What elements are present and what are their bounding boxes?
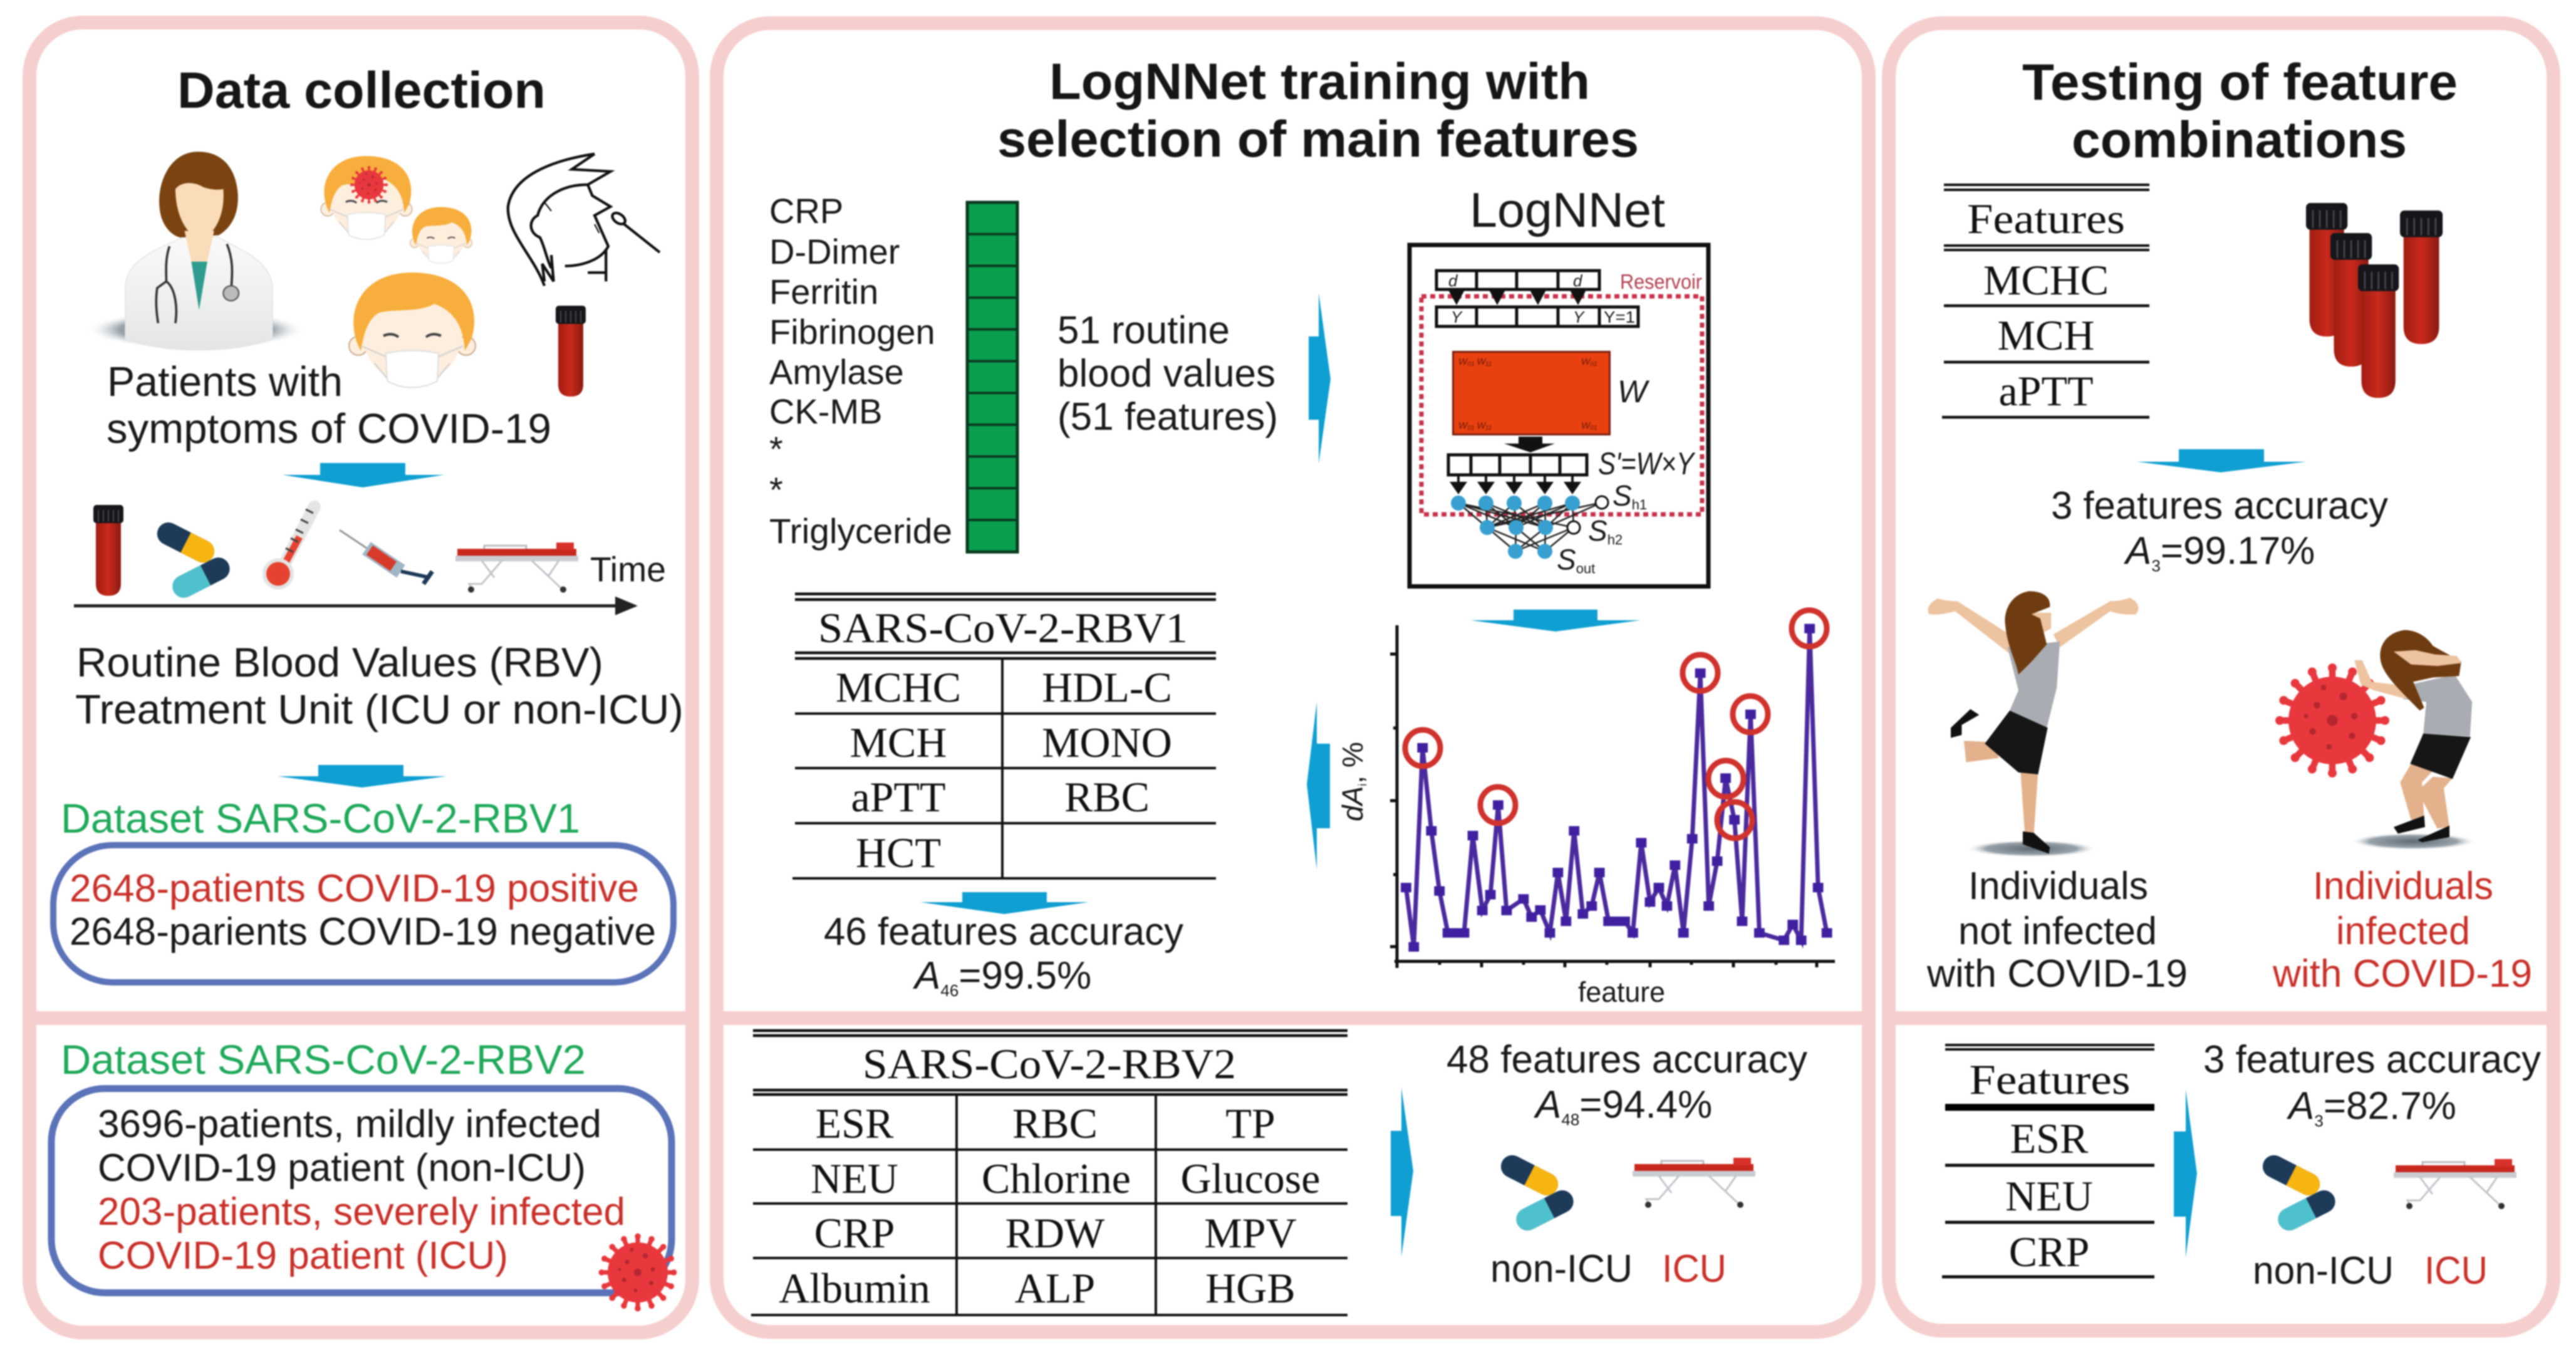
matrix W: W₀₁ W₁₁ <box>1458 356 1492 367</box>
table: SARS-CoV-2-RBV2: ESR <box>816 1100 894 1147</box>
icon: blood tube <box>93 505 123 596</box>
table: SARS-CoV-2-RBV1: SARS-CoV-2-RBV1 <box>818 604 1188 652</box>
arrow: down <box>2137 449 2306 472</box>
text: 3 features accuracy <box>2051 484 2388 575</box>
input row d: d <box>1573 271 1583 290</box>
labels: non-ICU and ICU: ICU <box>2424 1249 2488 1292</box>
text: patients with symptoms: Patients with <box>107 358 343 405</box>
bar: feature vector <box>967 202 1017 552</box>
list: blood features: CRP <box>769 191 843 231</box>
table: SARS-CoV-2-RBV2: TP <box>1225 1100 1275 1147</box>
table: SARS-CoV-2-RBV2: NEU <box>811 1155 898 1202</box>
row Y <box>1436 307 1638 326</box>
labels: S layers: S <box>1588 514 1607 547</box>
arrow: right <box>2174 1089 2197 1257</box>
panel: LogNNet training <box>710 23 1876 1332</box>
table: features RBV2: NEU <box>2005 1172 2093 1220</box>
table: SARS-CoV-2-RBV1: HDL-C <box>1042 663 1172 711</box>
labels: S layers <box>1557 479 1647 576</box>
text: not infected individuals <box>1926 865 2188 996</box>
text: 48 features accuracy <box>1446 1038 1807 1129</box>
row Y: Y <box>1573 308 1585 326</box>
matrix W: W₀₁ <box>1581 356 1597 367</box>
text: 51 routine blood values <box>1057 309 1278 439</box>
icon: blood tubes <box>2306 203 2443 398</box>
input row d: d <box>1448 271 1458 290</box>
row Y: Y=1 <box>1604 308 1635 326</box>
timeline icons <box>93 505 578 601</box>
icon: nasal swab test <box>508 154 660 286</box>
network connections <box>1458 502 1602 551</box>
text: routine blood values: Routine Blood Values (RBV) <box>76 639 603 685</box>
icon: stretcher <box>455 543 578 593</box>
table: SARS-CoV-2-RBV2: Albumin <box>779 1264 930 1312</box>
labels: S layers: h2 <box>1607 532 1623 548</box>
panel: testing of feature combinations <box>1882 23 2560 1331</box>
row Y: Y <box>1451 308 1463 326</box>
table: SARS-CoV-2-RBV1: RBC <box>1064 773 1150 821</box>
heading: dataset RBV1: Dataset SARS-CoV-2-RBV1 <box>61 795 580 841</box>
text: infected individuals <box>2272 865 2532 996</box>
text: 3 features accuracy: =99.17% <box>2161 529 2315 573</box>
icon: stretcher <box>2394 1159 2516 1209</box>
text: 3 features accuracy <box>2203 1038 2541 1130</box>
data series <box>1401 624 1832 952</box>
panel: data collection <box>23 23 699 1333</box>
table: SARS-CoV-2-RBV2: SARS-CoV-2-RBV2 <box>863 1040 1236 1088</box>
icon: pills <box>2259 1152 2339 1234</box>
text: 46 features accuracy: =99.5% <box>958 954 1091 997</box>
triangles <box>1448 290 1586 305</box>
arrow: down <box>283 463 444 487</box>
icon: virus <box>2275 663 2389 777</box>
box: dataset RBV1: 2648-parients COVID-19 negative <box>70 910 656 954</box>
text: not infected individuals: Individuals <box>1968 865 2148 908</box>
box: dataset RBV2: COVID-19 patient (non-ICU) <box>98 1146 586 1190</box>
labels: non-ICU and ICU <box>1490 1247 1727 1291</box>
icon: stretcher <box>1633 1158 1755 1208</box>
heading: data collection: Data collection <box>177 62 546 119</box>
table: features RBV2: ESR <box>2010 1115 2089 1162</box>
arrow: timeline <box>74 596 638 615</box>
text: routine blood values <box>75 639 683 732</box>
heading: LogNNet training: selection of main features <box>997 111 1639 168</box>
small arrows <box>1450 476 1581 494</box>
text: 48 features accuracy: =94.4% <box>1579 1083 1712 1126</box>
text: 46 features accuracy: 46 features accuracy <box>824 910 1183 954</box>
table: SARS-CoV-2-RBV1: MCHC <box>836 663 961 711</box>
heading: testing: Testing of feature <box>2022 54 2458 111</box>
table: features RBV1 <box>1942 185 2149 417</box>
label: W: W <box>1618 374 1650 409</box>
icon: syringe <box>340 530 432 584</box>
table: SARS-CoV-2-RBV2: RBC <box>1012 1100 1098 1147</box>
arrow: down <box>920 892 1089 914</box>
list: blood features: CK-MB <box>769 392 882 431</box>
text: 3 features accuracy: A <box>2286 1084 2314 1128</box>
table: SARS-CoV-2-RBV2: Glucose <box>1181 1155 1320 1202</box>
text: 3 features accuracy: =82.7% <box>2324 1084 2456 1128</box>
label: reservoir: Reservoir <box>1620 270 1702 293</box>
icon: happy woman <box>1928 591 2138 857</box>
labels: non-ICU and ICU <box>2253 1249 2488 1292</box>
table: features RBV2 <box>1942 1045 2154 1277</box>
text: 48 features accuracy: A <box>1533 1083 1561 1126</box>
list: blood features: Triglyceride <box>769 511 952 551</box>
table: features RBV2: CRP <box>2009 1228 2089 1276</box>
table: SARS-CoV-2-RBV1 <box>792 594 1216 878</box>
list: blood features: * <box>769 429 783 469</box>
labels: S layers: out <box>1576 561 1595 576</box>
box: dataset RBV1 <box>53 845 673 982</box>
labels: non-ICU and ICU: non-ICU <box>2253 1249 2394 1292</box>
table: SARS-CoV-2-RBV2 <box>751 1031 1348 1315</box>
table: SARS-CoV-2-RBV2: Chlorine <box>982 1155 1131 1202</box>
axis label: dA <box>1336 786 1369 821</box>
text: 51 routine blood values: (51 features) <box>1057 395 1278 439</box>
table: SARS-CoV-2-RBV2: CRP <box>814 1209 895 1257</box>
text: not infected individuals: with COVID-19 <box>1926 952 2188 996</box>
box: dataset RBV2: COVID-19 patient (ICU) <box>98 1234 508 1277</box>
heading: dataset RBV2: Dataset SARS-CoV-2-RBV2 <box>61 1036 586 1083</box>
arrow: down <box>278 765 447 788</box>
list: blood features: * <box>769 470 783 509</box>
text: not infected individuals: not infected <box>1958 910 2157 953</box>
box: dataset RBV2: 203-patients, severely infected <box>98 1190 625 1234</box>
table: features RBV1: MCH <box>1998 311 2094 359</box>
table: SARS-CoV-2-RBV1: MONO <box>1042 719 1172 766</box>
matrix W <box>1453 352 1610 435</box>
text: patients with symptoms <box>106 358 551 452</box>
text: 3 features accuracy: 3 <box>2314 1111 2324 1130</box>
text: 46 features accuracy <box>824 910 1183 1000</box>
table: SARS-CoV-2-RBV2: RDW <box>1005 1209 1105 1257</box>
text: infected individuals: infected <box>2336 910 2470 953</box>
matrix W: W₀₁ <box>1581 420 1597 431</box>
text: infected individuals: Individuals <box>2313 865 2493 908</box>
arrow: black down <box>1504 437 1555 452</box>
axis label: i <box>1356 784 1369 786</box>
arrow: right <box>1391 1088 1413 1257</box>
icon: thermometer <box>262 507 314 590</box>
label: time: Time <box>590 549 666 589</box>
heading: testing <box>2022 54 2458 169</box>
icon: pills <box>153 519 234 601</box>
text: 46 features accuracy: A <box>912 954 940 997</box>
table: features RBV1: Features <box>1967 195 2125 242</box>
box: dataset RBV1: 2648-patients COVID-19 positive <box>70 867 639 910</box>
icon: patients with masks <box>321 156 475 387</box>
text: routine blood values: Treatment Unit (ICU or non-ICU) <box>75 686 683 732</box>
heading: testing: combinations <box>2072 112 2407 169</box>
icon: sick woman <box>2350 630 2476 850</box>
icon: virus <box>599 1234 677 1311</box>
arrow: left <box>1307 702 1330 870</box>
table: SARS-CoV-2-RBV2: MPV <box>1204 1209 1297 1257</box>
labels: S layers: S <box>1557 543 1576 576</box>
arrow: right <box>1309 293 1331 464</box>
list: blood features: Amylase <box>769 352 904 392</box>
table: SARS-CoV-2-RBV1: HCT <box>856 829 941 876</box>
heading: LogNNet training: LogNNet training with <box>1049 53 1590 110</box>
axis label: , % <box>1336 742 1369 784</box>
list: blood features: D-Dimer <box>769 232 900 271</box>
list: blood features: Ferritin <box>769 272 878 311</box>
heading: LogNNet training <box>997 53 1639 168</box>
diagram: LogNNet architecture <box>1410 245 1708 586</box>
box: dataset RBV2 <box>51 1089 672 1293</box>
labels: non-ICU and ICU: non-ICU <box>1490 1247 1633 1291</box>
reservoir dotted outline <box>1421 296 1702 514</box>
labels: S layers: S <box>1613 479 1632 512</box>
matrix W: W₀₁ W₁₁ <box>1458 420 1492 431</box>
text: patients with symptoms: symptoms of COVID-19 <box>106 405 551 452</box>
table: features RBV1: MCHC <box>1983 256 2109 304</box>
table: features RBV2: Features <box>1970 1056 2130 1103</box>
table: SARS-CoV-2-RBV1: MCH <box>850 719 947 766</box>
labels: non-ICU and ICU: ICU <box>1662 1247 1727 1291</box>
box: dataset RBV2: 3696-patients, mildly infected <box>98 1103 601 1146</box>
list: blood features <box>769 191 952 551</box>
text: 48 features accuracy: 48 <box>1561 1110 1579 1129</box>
axes <box>1390 625 1835 968</box>
text: 46 features accuracy: 46 <box>940 981 958 1000</box>
arrow: down <box>1470 610 1641 632</box>
selected feature circles <box>1405 610 1827 838</box>
network nodes <box>1451 496 1608 559</box>
table: features RBV1: aPTT <box>1998 367 2094 415</box>
table: SARS-CoV-2-RBV2: ALP <box>1015 1264 1095 1312</box>
icon: blood tube <box>556 306 586 397</box>
list: blood features: Fibrinogen <box>769 312 935 351</box>
text: 3 features accuracy: A <box>2123 529 2151 573</box>
text: 3 features accuracy: 3 <box>2151 556 2161 575</box>
table: SARS-CoV-2-RBV2: HGB <box>1205 1264 1296 1312</box>
input row d <box>1436 271 1599 290</box>
axis label: feature <box>1578 976 1665 1008</box>
chart: dA by feature <box>1336 610 1835 1008</box>
icon: doctor <box>86 152 305 350</box>
table: SARS-CoV-2-RBV1: aPTT <box>851 773 946 821</box>
text: 48 features accuracy: 48 features accuracy <box>1446 1038 1807 1081</box>
labels: S layers: h1 <box>1632 497 1647 512</box>
text: 3 features accuracy: 3 features accuracy <box>2051 484 2388 528</box>
text: 51 routine blood values: blood values <box>1057 352 1275 395</box>
label: LogNNet: LogNNet <box>1470 182 1665 237</box>
formula: S'=W×Y <box>1598 446 1696 481</box>
text: 51 routine blood values: 51 routine <box>1057 309 1230 352</box>
text: 3 features accuracy: 3 features accuracy <box>2203 1038 2541 1081</box>
icon: pills <box>1497 1152 1577 1234</box>
row S <box>1448 455 1587 475</box>
text: infected individuals: with COVID-19 <box>2272 952 2532 996</box>
